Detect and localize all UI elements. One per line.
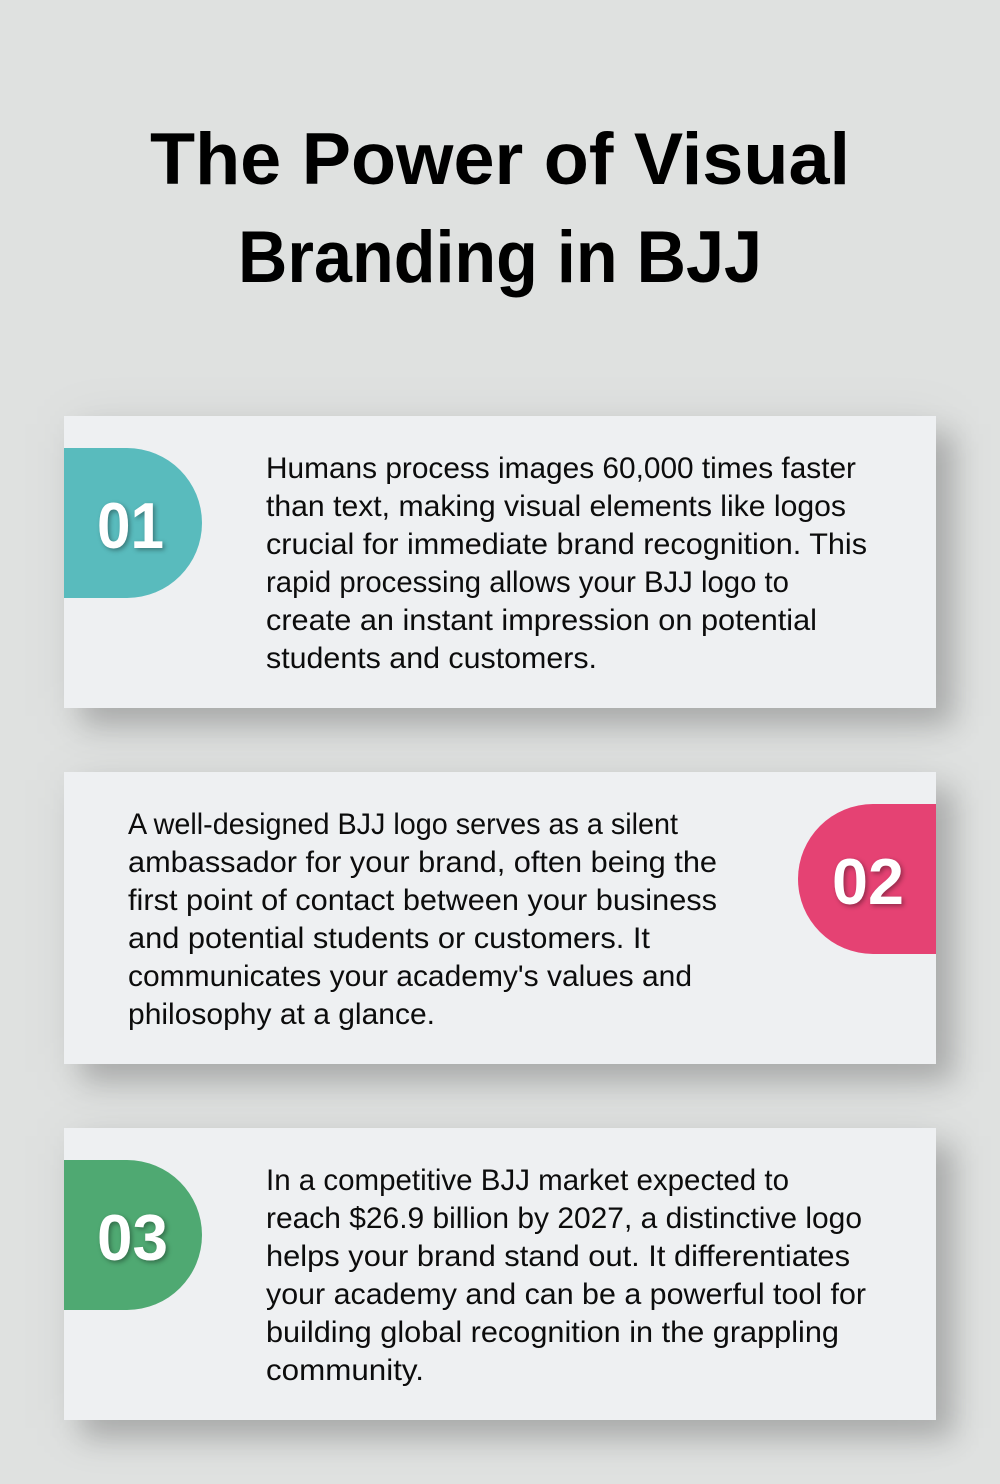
text block: card 02: and potential students or customers. It — [128, 922, 650, 955]
badge: 01: 01 — [97, 489, 164, 562]
title: The Power of Visual — [150, 119, 850, 200]
panel: card 02 — [64, 772, 936, 1064]
text block: card 02 — [128, 808, 717, 1031]
text block: card 03: In a competitive BJJ market expected to — [266, 1164, 789, 1197]
badge: 02 — [798, 804, 936, 954]
text block: card 03: reach $26.9 billion by 2027, a distinctive logo — [266, 1202, 862, 1235]
text block: card 03: community. — [266, 1354, 424, 1387]
text block: card 03: helps your brand stand out. It differentiates — [266, 1240, 850, 1273]
text block: card 01: students and customers. — [266, 642, 597, 675]
title: Branding in BJJ — [238, 217, 762, 298]
badge: 03 — [64, 1160, 202, 1310]
text block: card 01: than text, making visual elements like logos — [266, 490, 846, 523]
badge: 03: 03 — [97, 1201, 168, 1274]
text block: card 01: Humans process images 60,000 times faster — [266, 452, 856, 485]
text block: card 01: create an instant impression on potential — [266, 604, 817, 637]
text block: card 02: philosophy at a glance. — [128, 998, 435, 1031]
text block: card 01: crucial for immediate brand recognition. This — [266, 528, 867, 561]
text block: card 03: your academy and can be a powerful tool for — [266, 1278, 866, 1311]
text block: card 02: communicates your academy's values and — [128, 960, 692, 993]
text block: card 03 — [266, 1164, 866, 1387]
panel: card 01 — [64, 416, 936, 708]
text block: card 01 — [266, 452, 867, 675]
text block: card 01: rapid processing allows your BJJ logo to — [266, 566, 789, 599]
panel: card 03 — [64, 1128, 936, 1420]
title — [150, 119, 850, 298]
text block: card 02: first point of contact between your business — [128, 884, 717, 917]
text block: card 03: building global recognition in the grappling — [266, 1316, 839, 1349]
text block: card 02: A well-designed BJJ logo serves as a silent — [128, 808, 678, 841]
badge: 02: 02 — [832, 845, 904, 918]
badge: 01 — [64, 448, 202, 598]
text block: card 02: ambassador for your brand, often being the — [128, 846, 717, 879]
